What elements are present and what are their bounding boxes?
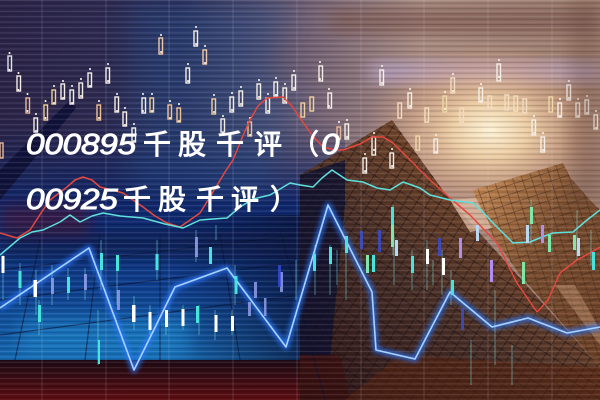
title line 1: 0 [321, 129, 339, 161]
red price line [0, 97, 600, 312]
title line 2: 股 [158, 184, 186, 215]
title line 2 [26, 184, 298, 216]
title line 2: 00925 [26, 184, 118, 216]
title line 2: 评 [231, 184, 259, 215]
title line 1: 评 [254, 129, 282, 160]
title line 1: 千 [216, 129, 244, 160]
buildings [300, 120, 600, 400]
vignette, right edge warm [570, 0, 600, 200]
dark diagonal arm, upper left [0, 100, 76, 200]
title line 2: ） [270, 184, 298, 215]
candlesticks, lower band [2, 200, 595, 385]
title line 1: 000895 [26, 129, 136, 161]
title line 1: 股 [178, 129, 206, 160]
blue zigzag line [0, 205, 600, 370]
title line 2: 千 [196, 184, 224, 215]
blue zigzag glow [0, 205, 600, 370]
candlesticks, upper band [0, 31, 598, 173]
perspective floor grid lower left [0, 230, 325, 400]
teal line [0, 170, 600, 255]
title line 2: 千 [123, 184, 151, 215]
candle wick dots [10, 26, 596, 178]
title line 1: （ [291, 129, 319, 160]
title line 1: 千 [143, 129, 171, 160]
title line 1 [26, 129, 340, 161]
